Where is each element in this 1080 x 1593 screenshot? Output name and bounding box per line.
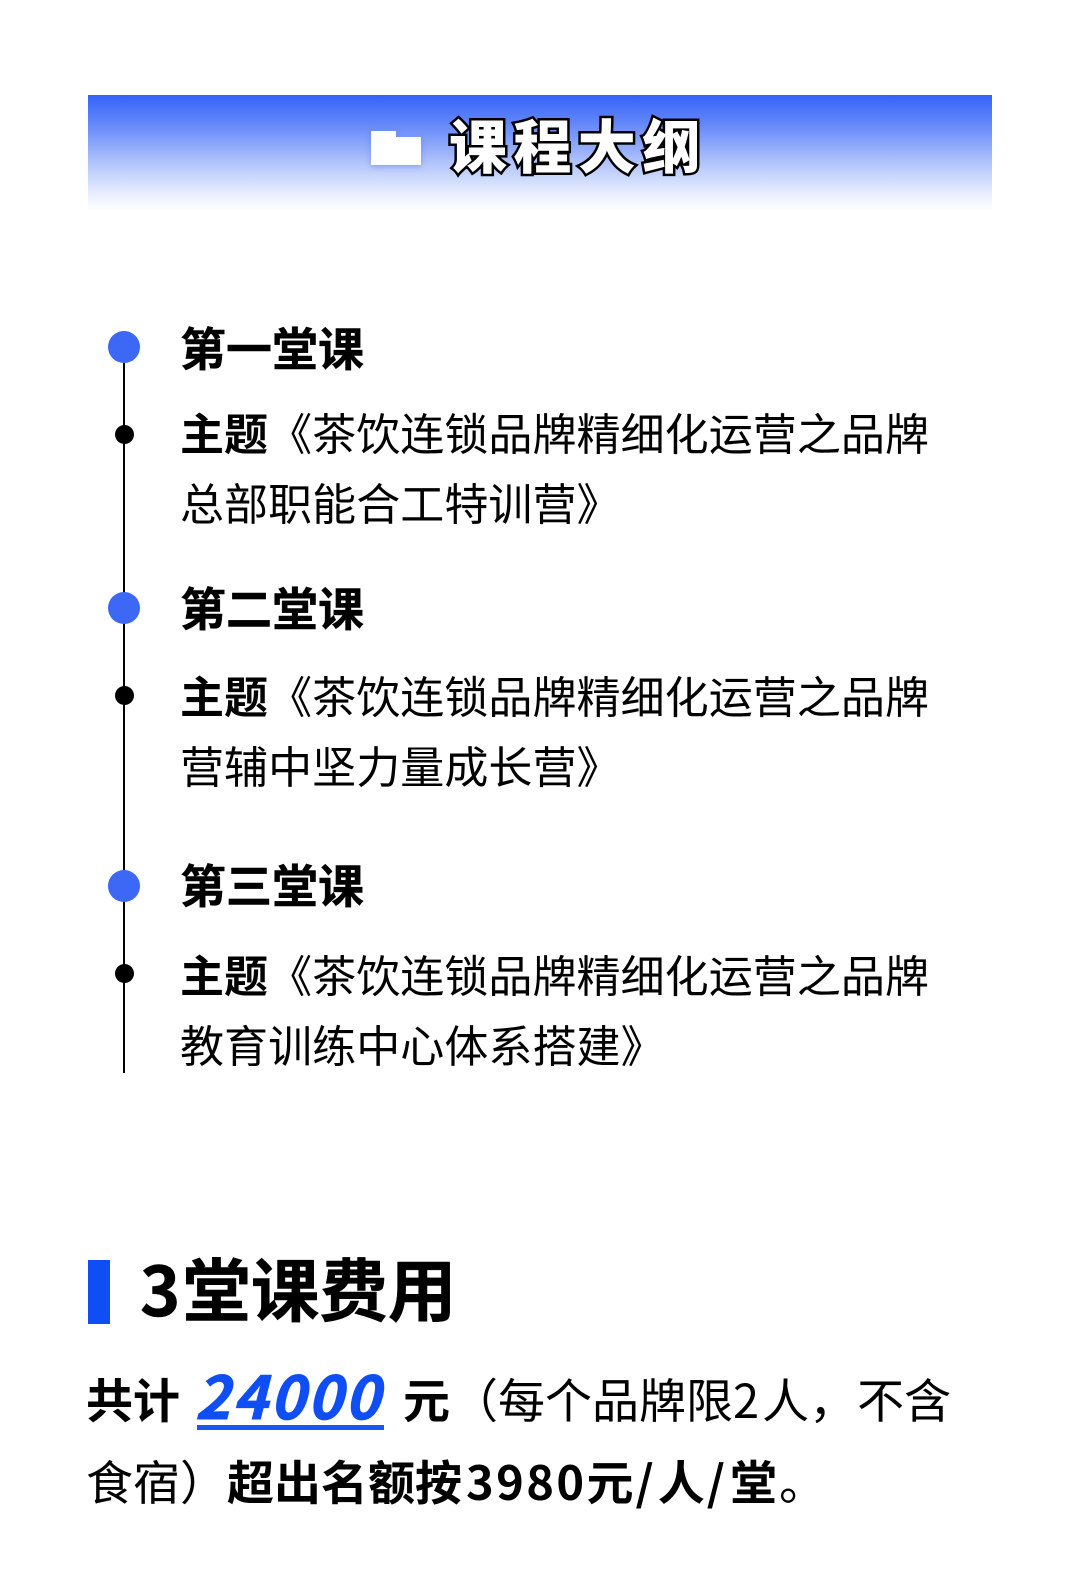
lesson 3 topic dot [115,964,134,983]
lesson 2 heading: 第二堂课 [180,574,364,640]
timeline vertical line [123,350,125,1073]
section heading: 3堂课费用: 3堂课费用 [140,1237,456,1336]
header banner: course outline [88,95,992,211]
title: 课程大纲: 课程大纲 [449,101,707,185]
section marker: blue bar [88,1260,110,1324]
timeline: three lessons [108,314,929,1075]
text: second line: 食宿）超出名额按3980元/人/堂。 [86,1445,826,1514]
lesson 1 node [108,331,140,363]
text: 共计: 共计 [86,1363,180,1432]
lesson 3 node [108,870,140,902]
lesson 3 topic text [180,941,929,1075]
lesson 2 node [108,592,140,624]
lesson 2 topic text [180,662,929,796]
lesson 3 topic text: 教育训练中心体系搭建》 [180,1011,665,1075]
lesson 2 topic text: 营辅中坚力量成长营》 [180,732,621,796]
lesson 3 topic text: 主题《茶饮连锁品牌精细化运营之品牌 [180,941,929,1005]
icon: white folder [368,131,424,170]
lesson 2 topic text: 主题《茶饮连锁品牌精细化运营之品牌 [180,662,929,726]
lesson 1 topic text [180,399,929,533]
price text block [86,1351,951,1514]
lesson 3 heading: 第三堂课 [180,851,364,917]
lesson 1 heading: 第一堂课 [180,314,364,380]
lesson 1 topic dot [115,425,134,444]
lesson 1 topic text: 总部职能合工特训营》 [180,469,621,533]
price: 24000: 24000 [195,1351,382,1436]
lesson 1 topic text: 主题《茶饮连锁品牌精细化运营之品牌 [180,399,929,463]
price underline [197,1425,384,1430]
lesson 2 topic dot [115,686,134,705]
text: 元 and note: 元（每个品牌限2人，不含 [403,1363,951,1432]
